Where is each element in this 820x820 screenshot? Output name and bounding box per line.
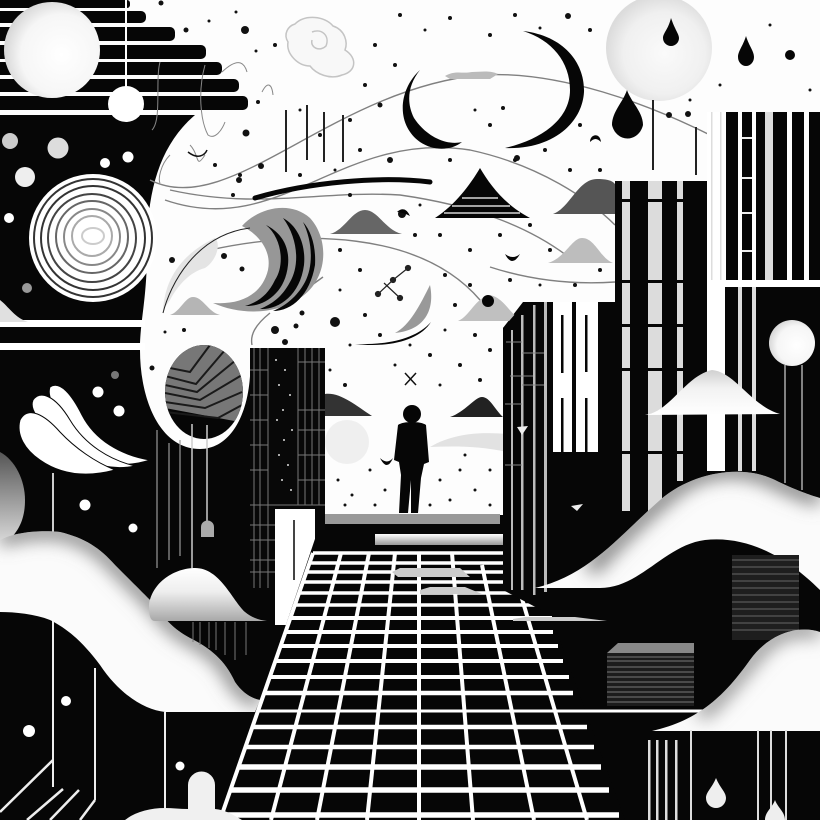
bottom left lines [0, 620, 165, 820]
hanging poles and weight [157, 424, 214, 568]
large white ball [4, 2, 100, 98]
distant mound left [325, 394, 372, 416]
small dome left [149, 568, 267, 621]
striped mountain [435, 168, 530, 218]
grey mound right [553, 179, 615, 214]
dark grid building [250, 348, 325, 590]
constellation icon [376, 266, 410, 300]
thin poles [286, 100, 696, 175]
feather leaf [19, 385, 150, 474]
lower right mound [652, 629, 820, 731]
water drops [612, 18, 754, 139]
large white wave left [0, 531, 260, 712]
hatch block [732, 555, 799, 640]
striped building centre right [503, 302, 615, 612]
thin swirl arc [163, 228, 250, 313]
white drops bottom right [706, 778, 785, 820]
feather crescent [355, 285, 431, 345]
white arrow mark [517, 426, 528, 435]
stippled ball [325, 420, 369, 464]
small cloud stripes [445, 72, 498, 79]
crescent moons [403, 31, 584, 149]
x mark [405, 373, 416, 385]
white band and lower right black block [707, 280, 820, 471]
scribbles [152, 62, 273, 183]
left side ball [0, 452, 25, 545]
dot near moon [785, 50, 795, 60]
striped circle [165, 345, 243, 439]
stacked slab [607, 643, 694, 706]
stepped stripes top left [0, 0, 248, 110]
small mound left [170, 297, 220, 315]
distant mound right [450, 397, 503, 417]
thick arc [255, 180, 430, 198]
right dome [645, 370, 780, 415]
sky dots [150, 0, 812, 506]
light patches on floor [375, 534, 607, 621]
grey mound centre [330, 210, 402, 234]
striped sphere [213, 208, 323, 311]
wispy cloud [430, 433, 507, 452]
pale moon disc [606, 0, 712, 101]
lower right stripes [648, 730, 787, 820]
tile floor [220, 530, 820, 820]
half moon mark [590, 135, 601, 142]
small black bird marks [380, 209, 520, 465]
grey smear [163, 238, 218, 310]
dome cloud [458, 295, 524, 321]
puffy cloud [286, 17, 354, 77]
horizon ground [325, 514, 500, 524]
right ball with poles [769, 320, 815, 490]
white chevron mark [571, 504, 583, 511]
person silhouette [394, 405, 429, 513]
poles under dome [193, 622, 246, 660]
left panel dots [2, 133, 134, 293]
large mound right [535, 469, 820, 590]
black tower with white stripes [615, 181, 707, 511]
floating dots left [23, 371, 184, 770]
white sky with swirl ring [0, 0, 820, 515]
striped tower right [707, 112, 820, 280]
small white ball on string [108, 0, 144, 122]
curved flight lines [150, 75, 710, 345]
pale mound [548, 238, 613, 263]
spiral disc [29, 174, 157, 302]
white bands left [0, 300, 145, 350]
bottom cloud [125, 772, 242, 820]
leaf stem [52, 473, 54, 534]
white door [275, 509, 315, 625]
